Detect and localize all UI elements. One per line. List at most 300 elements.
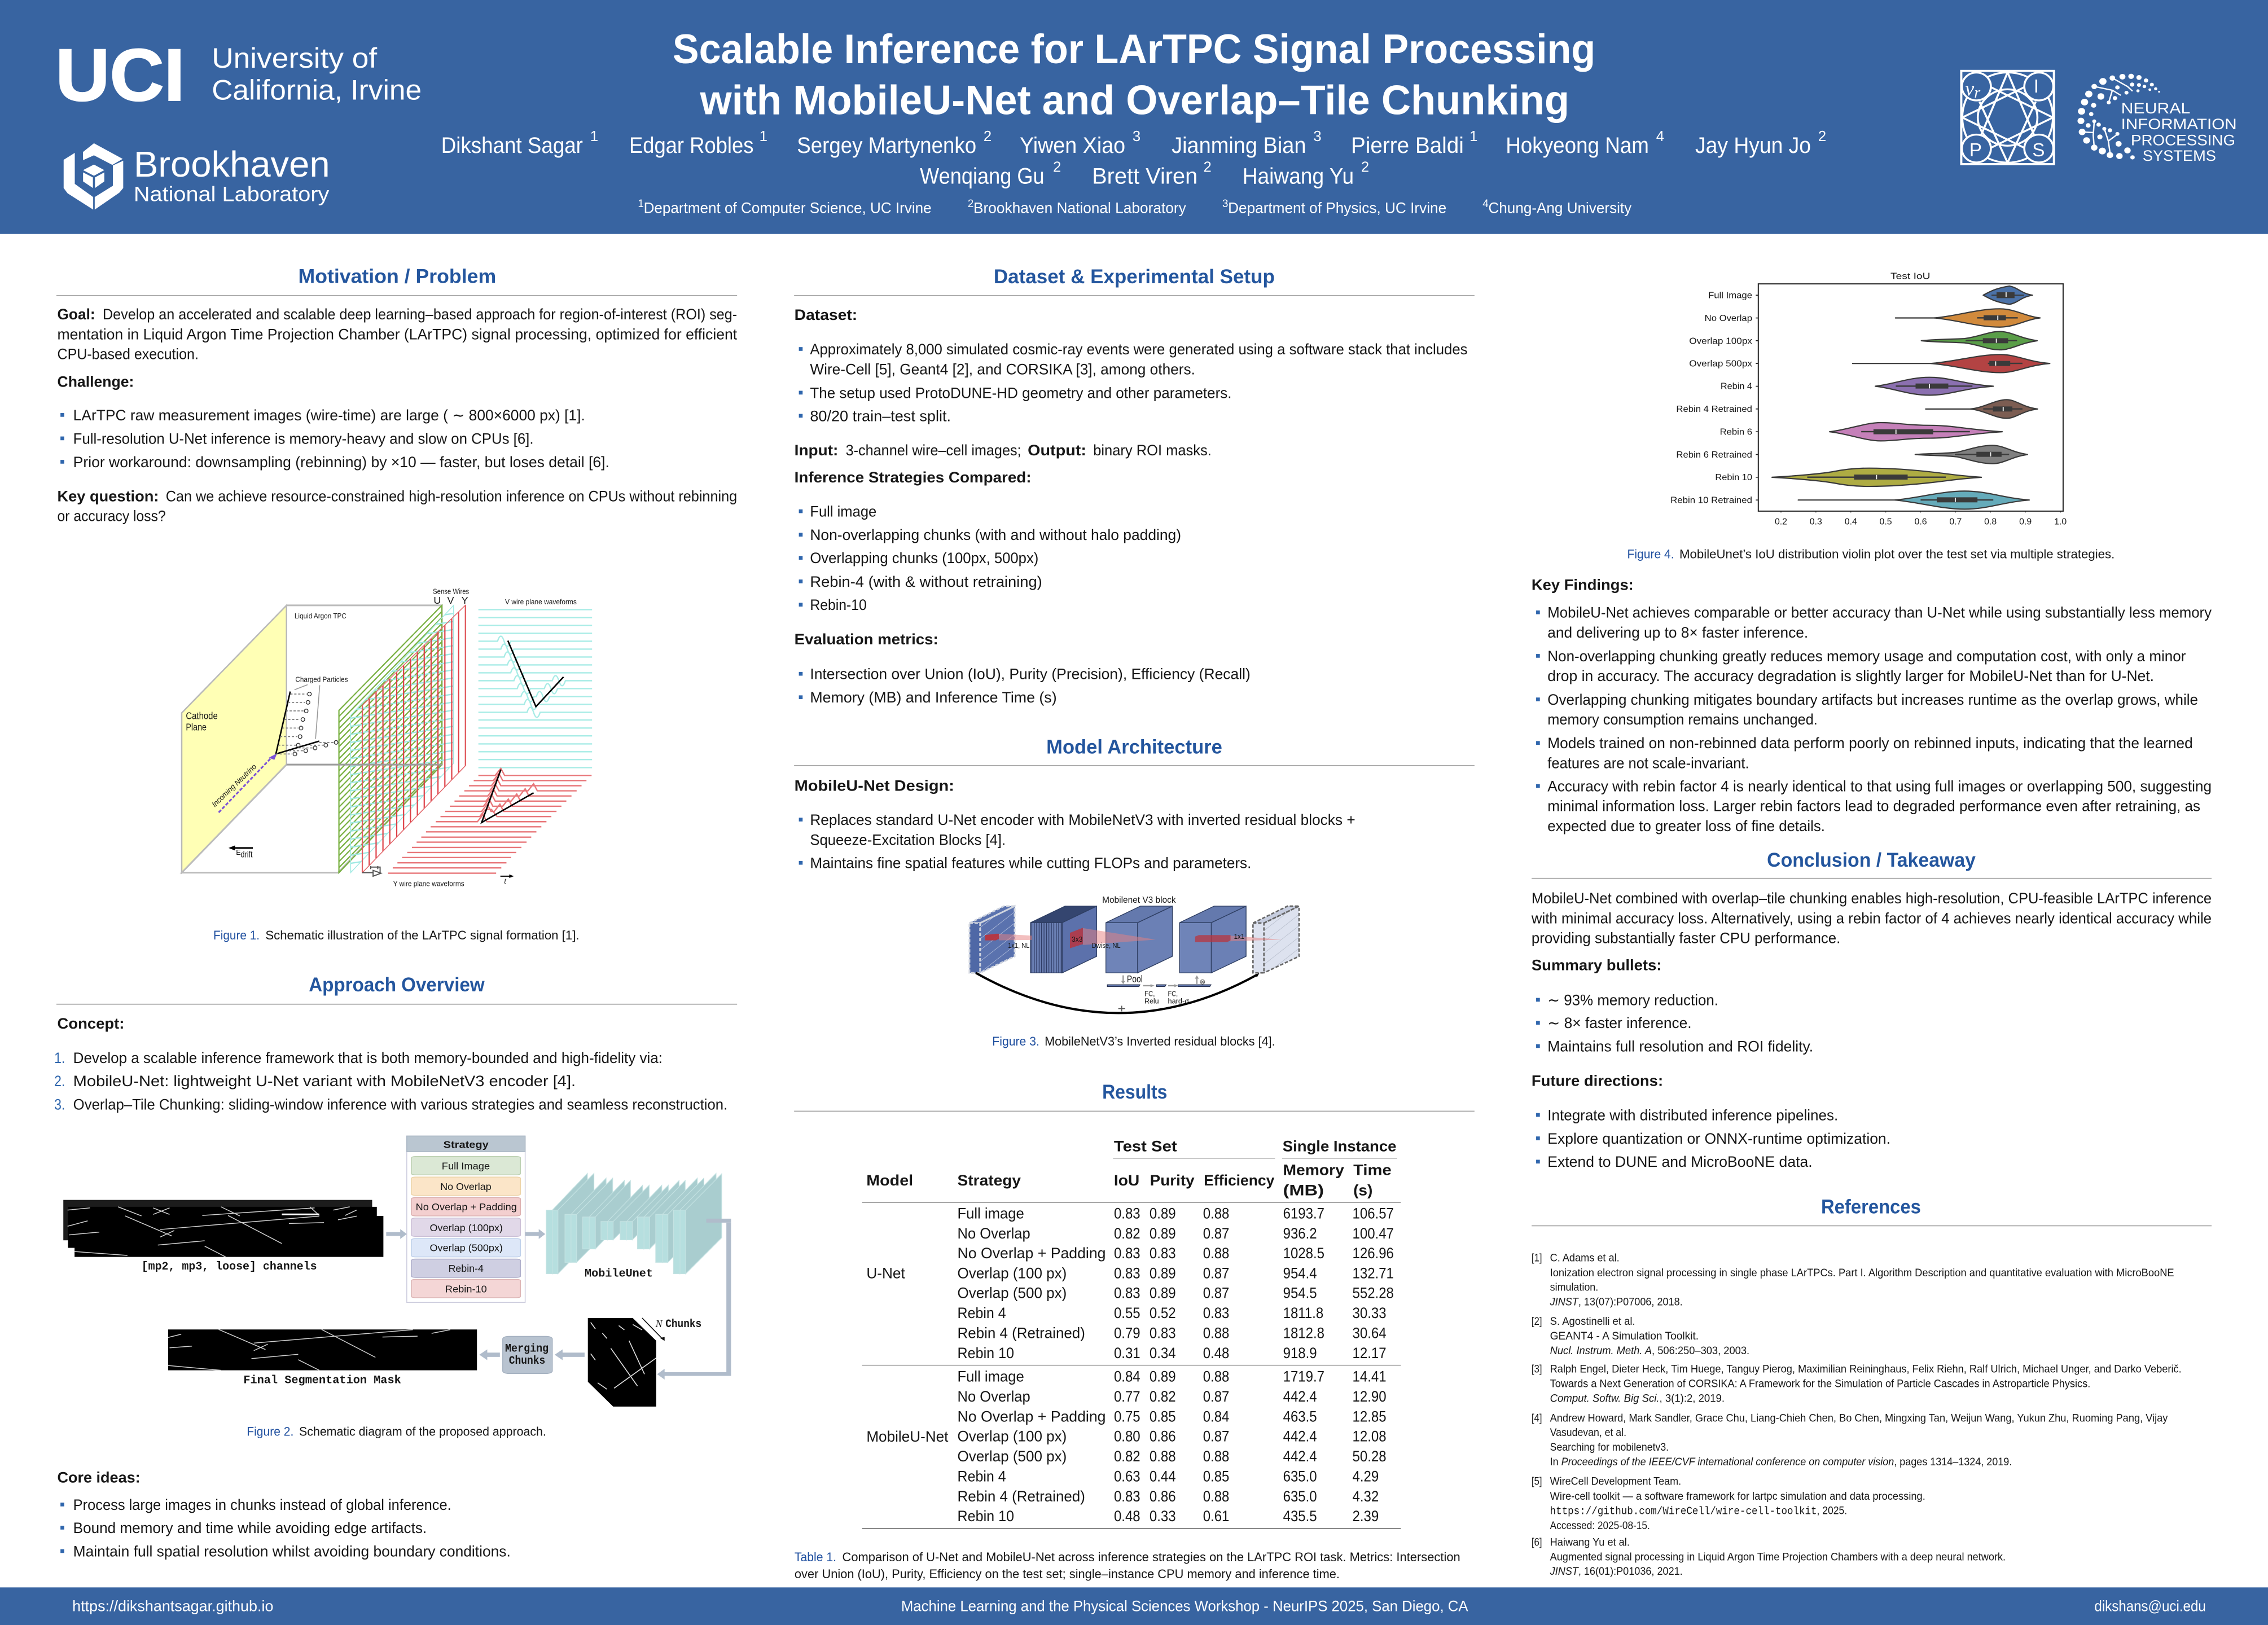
logo: UC Irvine: UCI: [55, 34, 185, 116]
authors: Haiwang Yu: [1243, 164, 1354, 189]
reference 1: [1]: [1532, 1251, 1542, 1264]
reference 1: C. Adams et al.: [1550, 1251, 1620, 1264]
authors: Dikshant Sagar: [441, 133, 583, 158]
numeric table cells: 1028.5: [1283, 1245, 1324, 1262]
x axis labels: [1775, 517, 2067, 527]
table header: Memory: [1283, 1162, 1344, 1179]
reference 5: [5]: [1532, 1475, 1542, 1488]
numeric table cells: 0.48: [1114, 1508, 1140, 1525]
reference 2: S. Agostinelli et al.: [1550, 1315, 1635, 1328]
numeric table cells: 0.88: [1203, 1368, 1229, 1385]
numeric table cells: 12.90: [1353, 1389, 1387, 1405]
authors: Yiwen Xiao: [1020, 133, 1125, 158]
caption: table 1: Table 1.: [795, 1550, 836, 1564]
bullet list: design: [799, 811, 1355, 872]
panel: model architecture: [794, 736, 1475, 1048]
reference 5: Wire-cell toolkit — a software framework for lartpc simulation and data processing.: [1550, 1490, 1925, 1503]
figure 1: LArTPC schematic: Liquid Argon TPC: [295, 612, 346, 620]
block 4: [1179, 906, 1246, 973]
strategy column: Rebin 10: [958, 1345, 1014, 1362]
numeric table cells: 635.0: [1283, 1468, 1317, 1485]
y axis labels: [1670, 291, 1752, 505]
bullet list: findings: [1536, 604, 2212, 835]
footer: workshop: Machine Learning and the Physical Sciences Workshop - NeurIPS 2025, San Diego, CA: [901, 1597, 1468, 1614]
bullet list: findings: Models trained on non-rebinned data perform poorly on rebinned inputs, indicating that the learned: [1547, 735, 2193, 752]
text block: key question: Key question:: [58, 488, 159, 504]
numeric table cells: 0.83: [1114, 1245, 1140, 1262]
bullet list: dataset: Wire-Cell [5], Geant4 [2], and CORSIKA [3], among others.: [810, 361, 1195, 377]
numbered list: concept: MobileU-Net: lightweight U-Net variant with MobileNetV3 encoder [4].: [73, 1073, 576, 1090]
reference 2: GEANT4 - A Simulation Toolkit.: [1550, 1330, 1699, 1342]
numeric table cells: 0.83: [1114, 1205, 1140, 1222]
subheading: dataset: Dataset:: [795, 306, 857, 323]
figure 2: pipeline diagram: MobileUnet: [585, 1268, 653, 1281]
numeric table cells: 0.83: [1150, 1325, 1176, 1342]
chart: violin plot of test IoU: Test IoU: [1890, 272, 1931, 282]
table header: Strategy: [958, 1172, 1021, 1189]
authors: 3: [1133, 129, 1140, 144]
reference 5: WireCell Development Team.: [1550, 1475, 1681, 1488]
block 2: [1030, 906, 1096, 973]
bullet list: challenge: [60, 407, 609, 471]
table header: Time: [1353, 1162, 1392, 1179]
reference 1: [1532, 1251, 2174, 1308]
authors: Sergey Martynenko: [797, 133, 976, 158]
affiliations: Brookhaven National Laboratory: [973, 199, 1186, 216]
reference 5: [1532, 1475, 1925, 1532]
figure 1: LArTPC schematic: U: [433, 595, 441, 606]
bullet list: future directions: Explore quantization or ONNX-runtime optimization.: [1547, 1130, 1890, 1147]
table header: (MB): [1283, 1182, 1324, 1199]
reference 3: Ralph Engel, Dieter Heck, Tim Huege, Tanguy Pierog, Maximilian Reininghaus, Felix Riehn, Ralf Ulrich, Michael Unger, and Darko Veberič.: [1550, 1363, 2182, 1375]
bullet list: metrics: Intersection over Union (IoU), Purity (Precision), Efficiency (Recall): [810, 666, 1251, 683]
bullet list: core ideas: Bound memory and time while avoiding edge artifacts.: [73, 1519, 427, 1536]
reference 5: https://github.com/WireCell/wire-cell-toolkit, 2025.: [1550, 1504, 1847, 1517]
figure 3: MobileNetV3 block: 1x1, NL: [1008, 941, 1029, 950]
text block: goal: Goal:: [58, 306, 95, 323]
logo: Neural Information Processing Systems: INFORMATION: [2121, 116, 2237, 133]
caption: figure 2: Schematic diagram of the proposed approach.: [299, 1425, 546, 1439]
text block: goal: Develop an accelerated and scalable deep learning–based approach for region-of-interest (ROI) seg-: [103, 306, 737, 323]
subheading: summary bullets: Summary bullets:: [1532, 957, 1662, 974]
strategy column: Rebin 4 (Retrained): [958, 1488, 1085, 1505]
reference 3: Comput. Softw. Big Sci., 3(1):2, 2019.: [1550, 1392, 1725, 1404]
figure 2: pipeline diagram: Rebin-10: [445, 1283, 487, 1294]
panel: references: [1532, 1196, 2212, 1578]
subheading: key findings: Key Findings:: [1532, 577, 1634, 594]
text block: conclusion: providing substantially faster CPU performance.: [1532, 930, 1840, 947]
numeric table cells: 918.9: [1283, 1345, 1317, 1362]
logo: NeurIPS square emblem: r: [1974, 84, 1981, 102]
reference 5: Accessed: 2025-08-15.: [1550, 1519, 1650, 1532]
title: [673, 26, 1595, 123]
numeric table cells: 0.79: [1114, 1325, 1140, 1342]
numeric table cells: 0.83: [1150, 1245, 1176, 1262]
authors: 1: [760, 129, 767, 144]
arrows: [386, 1223, 731, 1380]
authors: 1: [590, 129, 598, 144]
reference 1: Ionization electron signal processing in single phase LArTPCs. Part I. Algorithm Description and quantitative evaluation with MicroBooNE: [1550, 1267, 2174, 1279]
reference 1: JINST, 13(07):P07006, 2018.: [1550, 1296, 1683, 1308]
block 3: [1106, 906, 1173, 973]
bullet list: design: Squeeze-Excitation Blocks [4].: [810, 831, 1006, 848]
affiliations: 2: [968, 198, 973, 210]
caption: figure 4: MobileUnet’s IoU distribution violin plot over the test set via multiple strategies.: [1679, 547, 2115, 561]
figure 3: MobileNetV3 block: FC,: [1144, 989, 1155, 998]
bullet list: design: Replaces standard U-Net encoder with MobileNetV3 with inverted residual blocks +: [810, 811, 1355, 828]
numeric table cells: 100.47: [1353, 1226, 1394, 1242]
residual arc: [976, 973, 1260, 1013]
figure 1: LArTPC schematic: Y wire plane waveforms: [393, 880, 464, 888]
footer banner: [0, 1587, 2268, 1625]
text: input and output: [795, 442, 1212, 459]
authors: Hokyeong Nam: [1506, 133, 1649, 158]
caption: figure 2: Figure 2.: [247, 1425, 293, 1439]
figure 1: LArTPC schematic: V: [448, 595, 454, 606]
text block: goal: mentation in Liquid Argon Time Projection Chamber (LArTPC) signal processing, optimized for efficient: [58, 326, 738, 342]
text block: conclusion: MobileU-Net combined with overlap–tile chunking enables high-resolution, CPU-feasible LArTPC inference: [1532, 890, 2212, 907]
figure 2: pipeline diagram: [63, 1136, 731, 1407]
numbered list: concept: 1.: [54, 1049, 65, 1066]
figure 3: MobileNetV3 block: Dwise, NL: [1092, 941, 1121, 950]
numeric table cells: 0.82: [1114, 1226, 1140, 1242]
numbered list: concept: 3.: [54, 1096, 65, 1113]
subheading: future directions: Future directions:: [1532, 1072, 1663, 1089]
numeric table cells: 0.87: [1203, 1389, 1229, 1405]
authors: 2: [1053, 160, 1061, 175]
figure 2: pipeline diagram: Overlap (100px): [430, 1222, 503, 1233]
bullet list: findings: expected due to greater loss of fine details.: [1547, 818, 1825, 835]
bullet list: challenge: Full-resolution U-Net inference is memory-heavy and slow on CPUs [6].: [73, 430, 534, 447]
reference 2: Nucl. Instrum. Meth. A, 506:250–303, 2003.: [1550, 1345, 1749, 1357]
authors: Edgar Robles: [629, 133, 753, 158]
numeric table cells: 12.08: [1353, 1429, 1387, 1445]
block 5 dashed: [1253, 906, 1299, 973]
text: input and output: binary ROI masks.: [1093, 442, 1212, 459]
authors: 2: [1818, 129, 1826, 144]
numeric table cells: 0.34: [1150, 1345, 1176, 1362]
subheading: design: MobileU-Net Design:: [795, 777, 954, 794]
authors: 2: [1361, 160, 1369, 175]
caption: table 1: [795, 1550, 1460, 1581]
reference 6: JINST, 16(01):P01036, 2021.: [1550, 1565, 1683, 1578]
logo: UC Irvine: University of: [212, 42, 377, 74]
footer: email: dikshans@uci.edu: [2094, 1597, 2206, 1614]
chart: violin plot of test IoU: [1670, 272, 2067, 527]
numeric table cells: 0.86: [1150, 1429, 1176, 1445]
reference 6: [6]: [1532, 1536, 1542, 1548]
numeric table cells: 0.87: [1203, 1226, 1229, 1242]
bullet list: metrics: [799, 666, 1251, 706]
x axis labels: 0.9: [2019, 517, 2032, 527]
results table: [862, 1138, 1401, 1529]
reference 6: [1532, 1536, 2006, 1578]
heading: motivation: Motivation / Problem: [299, 265, 496, 287]
numeric table cells: 0.84: [1114, 1368, 1140, 1385]
caption: figure 3: MobileNetV3’s Inverted residual blocks [4].: [1045, 1034, 1275, 1048]
numeric table cells: 0.89: [1150, 1205, 1176, 1222]
figure 1: LArTPC schematic: drift: [241, 850, 253, 859]
authors: Jay Hyun Jo: [1695, 133, 1811, 158]
numeric table cells: 0.84: [1203, 1408, 1229, 1425]
caption: figure 3: Figure 3.: [992, 1034, 1039, 1048]
heading: model architecture: Model Architecture: [1046, 736, 1222, 758]
numeric table cells: 0.48: [1203, 1345, 1229, 1362]
numeric table cells: 12.85: [1353, 1408, 1387, 1425]
panel: conclusion: [1531, 849, 2212, 1170]
figure 3: MobileNetV3 block: ⊗: [1199, 978, 1206, 986]
figure 2: pipeline diagram: [mp2, mp3, loose] channels: [142, 1261, 317, 1273]
numeric table cells: 0.85: [1150, 1408, 1176, 1425]
numeric table cells: 0.83: [1203, 1305, 1229, 1321]
y axis labels: Overlap 100px: [1689, 336, 1752, 346]
figure 3: MobileNetV3 block: FC,: [1168, 989, 1178, 998]
chunk stack: [588, 1318, 665, 1407]
strategy panel: [407, 1136, 525, 1302]
affiliations: 4: [1482, 198, 1489, 210]
title: with MobileU-Net and Overlap–Tile Chunking: [700, 77, 1569, 123]
figure 1: LArTPC schematic: Incoming Neutrino: [210, 762, 258, 809]
logo: UC Irvine: [55, 34, 422, 116]
bullet list: dataset: 80/20 train–test split.: [810, 407, 951, 424]
strategy column: No Overlap: [958, 1225, 1030, 1242]
numeric table cells: 0.82: [1150, 1389, 1176, 1405]
bullet list: strategies: [799, 503, 1181, 613]
numeric table cells: 635.0: [1283, 1488, 1317, 1505]
authors: 3: [1313, 129, 1322, 144]
bullet list: findings: minimal information loss. Larger rebin factors lead to degraded performance even after retraining, as: [1547, 798, 2200, 815]
caption: figure 1: Schematic illustration of the LArTPC signal formation [1].: [265, 928, 580, 942]
bullet list: challenge: Prior workaround: downsampling (rebinning) by ×10 — faster, but loses detail [6].: [73, 454, 609, 471]
text: input and output: Output:: [1028, 442, 1086, 459]
text block: goal: [58, 306, 738, 363]
figure 2: pipeline diagram: Chunks: [665, 1318, 701, 1331]
numeric table cells: 442.4: [1283, 1429, 1317, 1445]
logo: Brookhaven National Laboratory: Brookhaven: [134, 144, 330, 185]
bullet list: dataset: The setup used ProtoDUNE-HD geometry and other parameters.: [810, 384, 1232, 401]
reference 4: [4]: [1532, 1412, 1542, 1424]
text block: conclusion: [1531, 890, 2212, 947]
affiliations: Department of Physics, UC Irvine: [1228, 199, 1446, 216]
authors: Jianming Bian: [1172, 133, 1306, 158]
logo: Neural Information Processing Systems: NEURAL: [2121, 100, 2190, 117]
MobileUnet stack: [546, 1174, 722, 1274]
logo: NeurIPS square emblem: I: [2034, 76, 2039, 97]
subheading: core ideas: Core ideas:: [58, 1469, 141, 1486]
numeric table cells: 0.85: [1203, 1468, 1229, 1485]
table header: [866, 1138, 1396, 1199]
text block: goal: CPU-based execution.: [58, 346, 199, 363]
figure 3: MobileNetV3 block: 1x1: [1234, 932, 1244, 941]
numeric table cells: 14.41: [1353, 1368, 1387, 1385]
panel: key findings: [1532, 577, 2212, 835]
logo: Brookhaven National Laboratory: National Laboratory: [134, 182, 330, 206]
panel: approach overview: [54, 974, 737, 1560]
x axis labels: 0.5: [1880, 517, 1892, 527]
y axis labels: Rebin 4: [1721, 382, 1752, 392]
numeric table cells: 0.89: [1150, 1368, 1176, 1385]
numeric table cells: 0.80: [1114, 1429, 1140, 1445]
numeric table cells: 6193.7: [1283, 1205, 1324, 1222]
y axis labels: Rebin 4 Retrained: [1676, 405, 1752, 414]
numeric table cells: 2.39: [1353, 1508, 1379, 1525]
numeric table cells: 1812.8: [1283, 1325, 1324, 1342]
numeric table cells: 442.4: [1283, 1389, 1317, 1405]
bullet list: summary: [1536, 991, 1813, 1055]
numeric table cells: 0.88: [1150, 1448, 1176, 1465]
table header: Efficiency: [1204, 1172, 1275, 1189]
final mask: [168, 1329, 477, 1371]
y axis labels: Full Image: [1708, 291, 1752, 301]
numeric table cells: 4.29: [1353, 1468, 1379, 1485]
x axis labels: 0.6: [1915, 517, 1927, 527]
merging box: [503, 1336, 552, 1373]
authors: 1: [1469, 129, 1477, 144]
text block: key question: Can we achieve resource-constrained high-resolution inference on CPUs without rebinning: [166, 488, 737, 504]
numbered list: concept: Develop a scalable inference framework that is both memory-bounded and high-fidelity via:: [73, 1049, 663, 1066]
heading: results: Results: [1102, 1081, 1167, 1103]
numeric table cells: 0.89: [1150, 1265, 1176, 1282]
caption: table 1: Comparison of U-Net and MobileU-Net across inference strategies on the LArTPC ROI task. Metrics: Intersection: [843, 1550, 1460, 1564]
figure 1: LArTPC schematic: Cathode: [186, 710, 218, 722]
figure 1: LArTPC schematic: [182, 587, 592, 888]
bullet list: findings: and delivering up to 8× faster inference.: [1547, 624, 1808, 641]
bullet list: core ideas: Maintain full spatial resolution whilst avoiding boundary conditions.: [73, 1543, 511, 1560]
figure 3: MobileNetV3 block: Mobilenet V3 block: [1102, 895, 1176, 905]
strategy column: [958, 1205, 1106, 1525]
text block: conclusion: with minimal accuracy loss. Alternatively, using a rebin factor of 4 achieves nearly identical accuracy while: [1531, 910, 2212, 926]
authors: [441, 129, 1826, 189]
reference 2: [1532, 1315, 1749, 1357]
subheading: inference strategies: Inference Strategies Compared:: [795, 469, 1032, 486]
figure 2: pipeline diagram: Full Image: [442, 1161, 490, 1172]
figure 1: LArTPC schematic: V wire plane waveforms: [505, 598, 577, 606]
header banner: [0, 0, 2268, 234]
authors: Brett Viren: [1092, 164, 1197, 189]
numeric table cells: 106.57: [1353, 1205, 1394, 1222]
figure 1: LArTPC schematic: Plane: [186, 722, 207, 733]
bullet list: strategies: Rebin-4 (with & without retraining): [810, 573, 1042, 590]
numbered list: concept: Overlap–Tile Chunking: sliding-window inference with various strategies and seamless reconstruction.: [73, 1096, 727, 1113]
x axis labels: 0.8: [1984, 517, 1997, 527]
numeric table cells: 0.87: [1203, 1265, 1229, 1282]
caption: figure 4: Figure 4.: [1627, 547, 1674, 561]
bullet list: findings: Overlapping chunking mitigates boundary artifacts but increases runtime as the overlap grows, while: [1547, 691, 2198, 708]
reference 4: Vasudevan, et al.: [1550, 1426, 1626, 1439]
numeric table cells: 0.87: [1203, 1429, 1229, 1445]
figure 2: pipeline diagram: Rebin-4: [449, 1263, 484, 1274]
figure 2: pipeline diagram: Strategy: [444, 1139, 489, 1150]
strategy column: Overlap (100 px): [958, 1428, 1067, 1445]
table header: (s): [1353, 1182, 1372, 1199]
block 1 hatched: [970, 906, 1015, 973]
numeric table cells: 0.89: [1150, 1226, 1176, 1242]
footer: website: https://dikshantsagar.github.io: [72, 1597, 273, 1614]
squeeze branch: [1107, 976, 1211, 987]
numbered list: concept: 2.: [54, 1073, 65, 1090]
panel: dataset and experimental setup: [794, 266, 1475, 706]
bullet list: summary: ∼ 8× faster inference.: [1547, 1014, 1692, 1031]
logo: NeurIPS square emblem: S: [2032, 140, 2045, 161]
numeric table cells: 1719.7: [1283, 1368, 1324, 1385]
numeric table cells: 0.55: [1114, 1305, 1140, 1321]
bullet list: findings: features are not scale-invariant.: [1547, 754, 1749, 771]
numeric table cells: 0.52: [1150, 1305, 1176, 1321]
numeric table cells: 0.31: [1114, 1345, 1140, 1362]
strategy column: No Overlap + Padding: [958, 1408, 1106, 1425]
subheading: evaluation metrics: Evaluation metrics:: [795, 631, 938, 648]
numeric table cells: 126.96: [1353, 1245, 1394, 1262]
logo: NeurIPS square emblem: ν: [1965, 77, 1974, 100]
logo: NeurIPS square emblem: P: [1969, 140, 1982, 161]
reference 4: Searching for mobilenetv3.: [1550, 1441, 1669, 1453]
authors: 2: [984, 129, 992, 144]
figure 2: pipeline diagram: Merging: [505, 1342, 549, 1355]
numeric table cells: 435.5: [1283, 1508, 1317, 1525]
numeric table cells: 0.83: [1114, 1285, 1140, 1302]
strategy column: Full image: [958, 1205, 1024, 1222]
strategy column: Overlap (100 px): [958, 1265, 1067, 1282]
title: Scalable Inference for LArTPC Signal Processing: [673, 26, 1595, 72]
x axis labels: 0.4: [1845, 517, 1857, 527]
strategy column: No Overlap + Padding: [958, 1245, 1106, 1262]
y axis labels: Rebin 10 Retrained: [1670, 495, 1752, 505]
strategy column: Rebin 10: [958, 1508, 1014, 1525]
numeric table cells: 552.28: [1353, 1285, 1394, 1302]
figure 2: pipeline diagram: No Overlap: [440, 1181, 492, 1192]
panel: motivation / problem: [56, 265, 738, 942]
bullet list: summary: ∼ 93% memory reduction.: [1547, 991, 1718, 1008]
figure 2: pipeline diagram: Chunks: [509, 1355, 545, 1368]
numeric table cells: 442.4: [1283, 1448, 1317, 1465]
y axis labels: No Overlap: [1705, 314, 1752, 323]
authors: Wenqiang Gu: [920, 164, 1045, 189]
caption: table 1: over Union (IoU), Purity, Efficiency on the test set; single–instance CPU memory and inference time.: [795, 1567, 1340, 1581]
bullet list: future directions: Extend to DUNE and MicroBooNE data.: [1547, 1153, 1813, 1170]
numeric table cells: 0.88: [1203, 1245, 1229, 1262]
red beams: [985, 928, 1282, 948]
reference 3: [3]: [1532, 1363, 1542, 1375]
figure 2: pipeline diagram: Overlap (500px): [430, 1242, 503, 1254]
bullet list: strategies: Non-overlapping chunks (with and without halo padding): [810, 526, 1181, 543]
figure 1: LArTPC schematic: Sense Wires: [433, 587, 470, 596]
numeric table cells: 0.87: [1203, 1285, 1229, 1302]
numeric table cells: 0.83: [1114, 1488, 1140, 1505]
numeric table cells: 0.61: [1203, 1508, 1229, 1525]
subheading: concept: Concept:: [58, 1015, 124, 1032]
numeric table cells: 0.83: [1114, 1265, 1140, 1282]
strategy column: Rebin 4: [958, 1468, 1006, 1485]
reference 2: [2]: [1532, 1315, 1542, 1328]
figure 3: MobileNetV3 block: Relu: [1144, 997, 1159, 1005]
bullet list: strategies: Full image: [810, 503, 876, 520]
logo: Brookhaven National Laboratory: [64, 143, 330, 210]
numeric table cells: 954.5: [1283, 1285, 1317, 1302]
strategy column: Rebin 4: [958, 1305, 1006, 1321]
figure 1: LArTPC schematic: Y: [462, 595, 468, 606]
figure 1: LArTPC schematic: E: [236, 848, 241, 857]
row labels: models: MobileU-Net: [866, 1428, 949, 1445]
figure 1: LArTPC schematic: t: [504, 877, 507, 885]
input image stack: [63, 1200, 383, 1257]
numeric table cells: 30.33: [1353, 1305, 1387, 1321]
figure 1: LArTPC schematic: Charged Particles: [295, 675, 348, 684]
authors: Pierre Baldi: [1351, 133, 1464, 158]
strategy column: Full image: [958, 1368, 1024, 1385]
y axis labels: Rebin 6 Retrained: [1676, 450, 1752, 460]
numeric table cells: 0.88: [1203, 1488, 1229, 1505]
bullet list: findings: Accuracy with rebin factor 4 is nearly identical to that using full images or overlapping 500, suggesting: [1547, 778, 2212, 795]
